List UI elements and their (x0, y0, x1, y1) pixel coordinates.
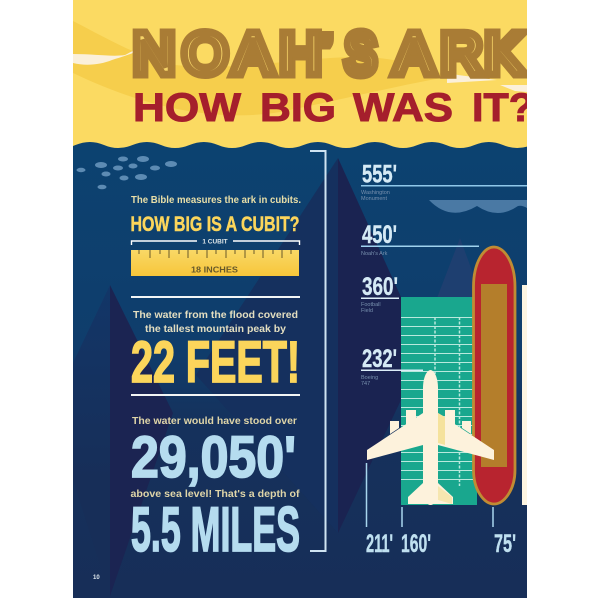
mountain: tall peak (196, 158, 482, 533)
title: Noah's Ark: ’ (323, 30, 331, 68)
sea level text: above sea level! That's a depth of (130, 488, 300, 500)
scale labels (361, 160, 527, 387)
cubit intro text: The Bible measures the ark in cubits. (131, 195, 301, 206)
cubit span bracket (130, 239, 300, 245)
title: Noah's Ark: NOAH (134, 22, 321, 86)
boeing 747 plane (367, 370, 494, 505)
subtitle: How big was it?: HOW (133, 86, 241, 130)
scale: Washington Monument: Washington (361, 190, 390, 196)
title: Noah's Ark (132, 28, 527, 80)
scale: Washington Monument (361, 164, 527, 200)
width markers (366, 463, 516, 558)
title: Noah's Ark: S (345, 22, 376, 86)
stat: 29,050 feet: 29,050' (131, 425, 296, 490)
bracket (310, 151, 326, 551)
football field (401, 297, 477, 505)
scale: Boeing 747: Boeing (361, 375, 378, 381)
scale: Noah's Ark: Noah's Ark (361, 251, 388, 257)
subtitle: How big was it?: IT? (472, 86, 534, 130)
width: 160 feet: 160' (401, 530, 431, 558)
panel: water depth fact (130, 415, 300, 565)
ruler (131, 250, 299, 276)
title: Noah's Ark: NOAH (134, 22, 321, 86)
stat: 5.5 miles: 5.5 MILES (131, 495, 300, 565)
flood text: The water from the flood covered (133, 309, 298, 321)
divider (131, 394, 300, 396)
width: 211 feet: 211' (366, 530, 393, 558)
panel: flood peak fact (132, 310, 298, 383)
divider (131, 296, 300, 298)
scale: football field: 360' (362, 273, 398, 301)
title: Noah's Ark: ARK (395, 22, 523, 86)
scale: Boeing 747: 232' (362, 345, 397, 373)
infographic page (73, 0, 527, 598)
panel: yellow sky header (73, 0, 527, 160)
scale: Boeing 747 (361, 349, 423, 385)
scale: Noah's Ark (361, 225, 479, 255)
scale: Washington Monument: 555' (362, 160, 397, 188)
scale: Washington Monument: Monument (361, 196, 387, 202)
mountain: left peak (73, 285, 173, 596)
scale: Boeing 747: 747 (361, 381, 370, 387)
subtitle: How big was it? (135, 92, 527, 122)
title: Noah's Ark: ARK (395, 22, 523, 86)
cubit span bracket: 1 CUBIT (202, 238, 228, 246)
cloud (429, 200, 527, 213)
stat: 22 feet: 22 FEET! (131, 330, 300, 395)
depth text: The water would have stood over (132, 415, 297, 427)
scale: football field (361, 277, 399, 312)
flood text: the tallest mountain peak by (145, 323, 286, 335)
panel: deep blue sea (47, 142, 532, 598)
page number: 10 (93, 575, 100, 581)
title: Noah's Ark: S (345, 22, 376, 86)
scale: football field: Field (361, 308, 373, 314)
flood text (133, 309, 298, 335)
subtitle: How big was it?: WAS (353, 86, 453, 130)
school of fish (76, 156, 177, 189)
cubit heading: HOW BIG IS A CUBIT? (130, 212, 300, 236)
scale: football field: Football (361, 302, 381, 308)
scale: Noah's Ark: 450' (362, 221, 397, 249)
panel: cubit explainer (130, 195, 301, 276)
cream edge strip (522, 285, 527, 505)
ruler: 18 INCHES (191, 264, 238, 274)
width: 75 feet: 75' (494, 530, 516, 558)
subtitle: How big was it?: BIG (260, 86, 336, 130)
ark top view (474, 247, 515, 504)
title: Noah's Ark: ’ (323, 30, 331, 68)
